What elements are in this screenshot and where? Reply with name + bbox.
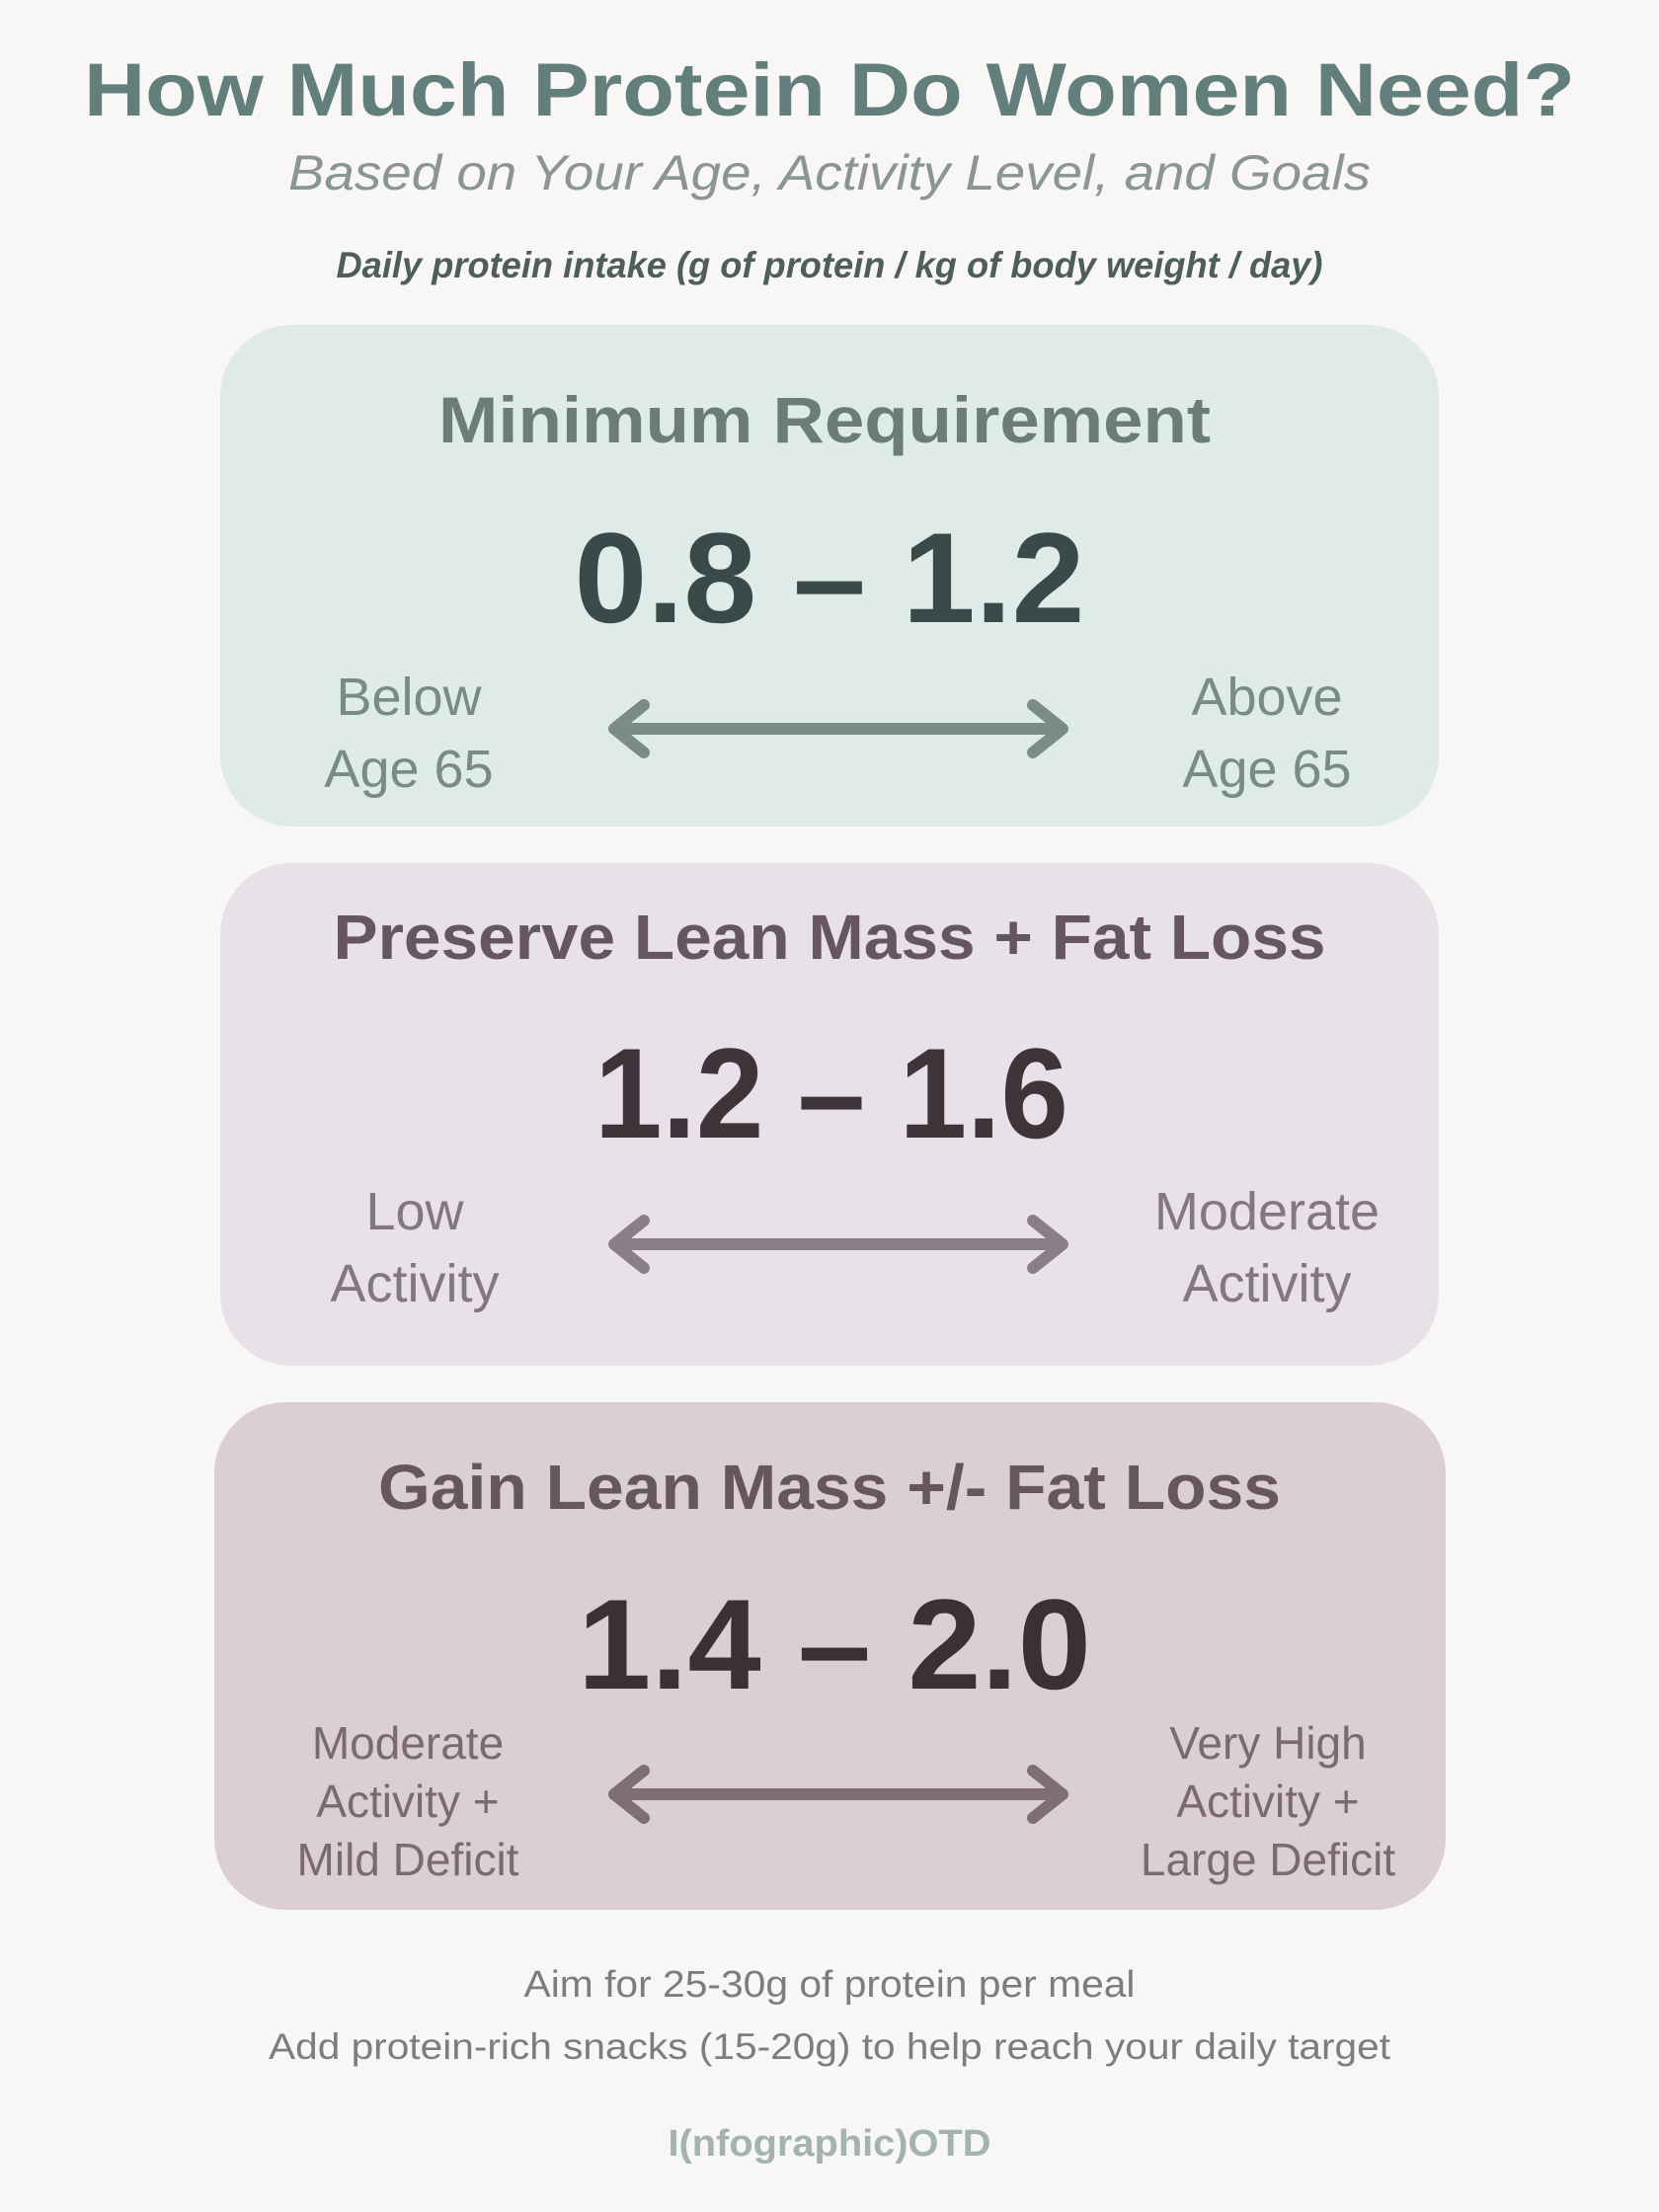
heading: minimum requirement: Minimum Requirement <box>438 383 1211 456</box>
arrow: double <box>614 1221 1063 1268</box>
label: moderate activity: Moderate <box>1154 1182 1380 1241</box>
title: How Much Protein Do Women Need? <box>84 48 1575 132</box>
label: very high activity + large deficit: Activity + <box>1176 1776 1360 1827</box>
label: moderate activity + mild deficit: Moderate <box>312 1717 504 1769</box>
arrow: double <box>614 1771 1063 1818</box>
label: above age 65: Above <box>1191 668 1343 727</box>
label: moderate activity + mild deficit: Mild Deficit <box>297 1834 519 1885</box>
label: moderate activity: Activity <box>1182 1254 1352 1313</box>
label: moderate activity + mild deficit: Activity + <box>316 1776 500 1827</box>
panel: gain lean mass <box>214 1402 1446 1910</box>
footer tips <box>269 1964 1391 2067</box>
label: low activity: Activity <box>330 1254 500 1313</box>
number: 1.4 – 2.0: 1.4 – 2.0 <box>578 1572 1091 1716</box>
panel: preserve lean mass <box>220 863 1439 1366</box>
label: very high activity + large deficit: Very High <box>1169 1717 1367 1769</box>
caption: units: Daily protein intake (g of protein / kg of body weight / day) <box>336 245 1323 285</box>
credit: I(nfographic)OTD <box>668 2123 991 2165</box>
subtitle: Based on Your Age, Activity Level, and Goals <box>288 145 1371 200</box>
number: 0.8 – 1.2: 0.8 – 1.2 <box>575 506 1084 650</box>
label: below age 65: Age 65 <box>324 740 494 799</box>
number: 1.2 – 1.6: 1.2 – 1.6 <box>594 1021 1068 1165</box>
heading: gain lean mass +/- fat loss: Gain Lean Mass +/- Fat Loss <box>378 1452 1281 1523</box>
heading: preserve lean mass + fat loss: Preserve Lean Mass + Fat Loss <box>334 902 1325 973</box>
label: above age 65: Age 65 <box>1182 740 1352 799</box>
label: low activity: Low <box>365 1182 465 1241</box>
arrow: double <box>614 705 1063 752</box>
footer tips: Aim for 25-30g of protein per meal <box>523 1964 1136 2006</box>
label: very high activity + large deficit: Large Deficit <box>1141 1834 1395 1885</box>
panel: minimum requirement <box>220 325 1439 827</box>
footer tips: Add protein-rich snacks (15-20g) to help reach your daily target <box>269 2026 1391 2067</box>
label: below age 65: Below <box>336 668 483 727</box>
